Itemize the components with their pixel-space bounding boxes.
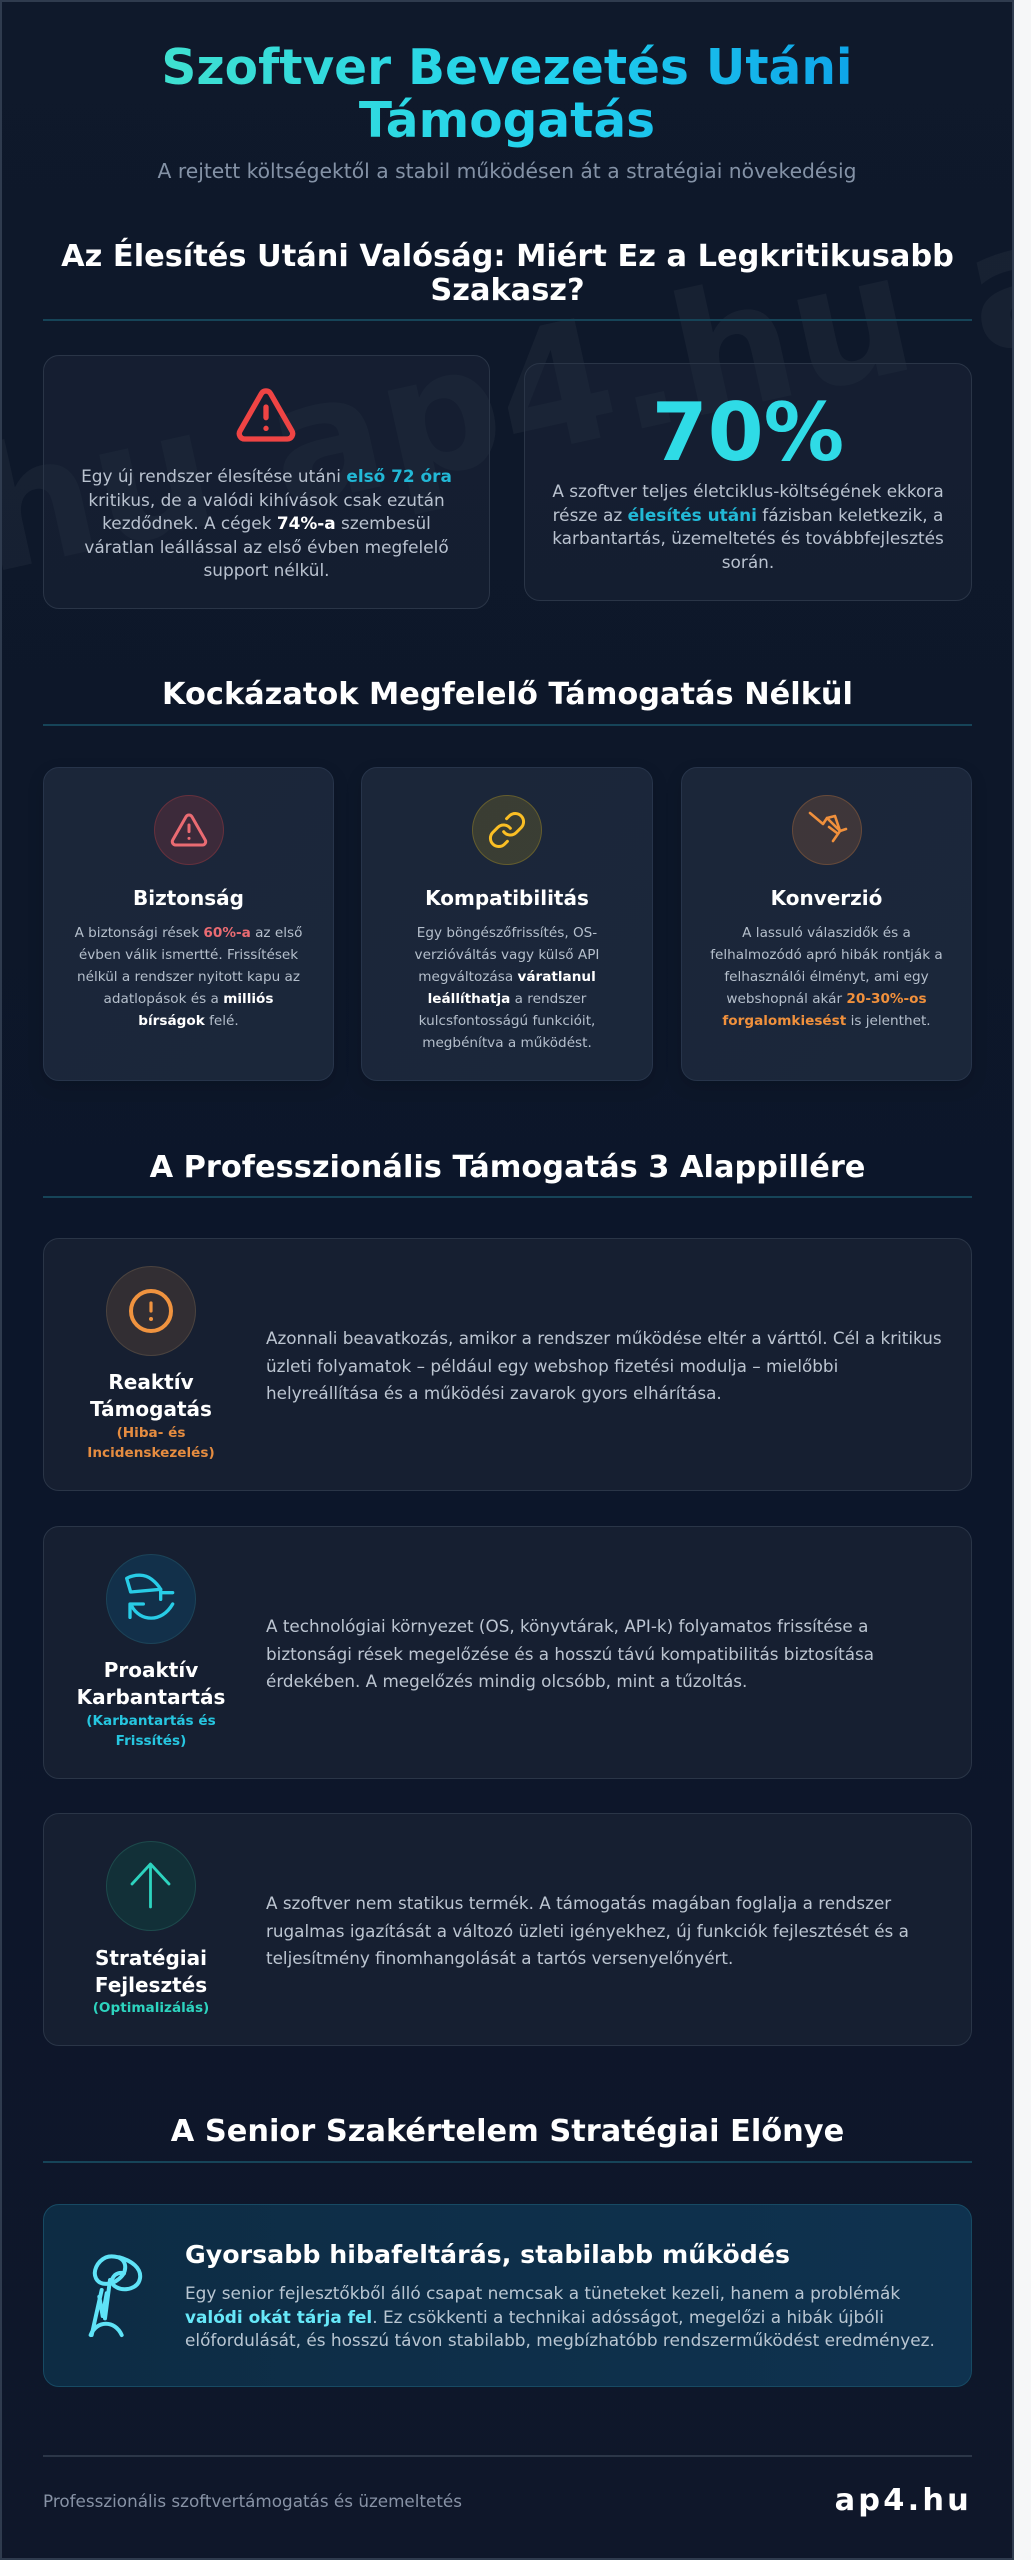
heading: valóság: Szakasz? (430, 272, 585, 308)
text: megváltozása váratlanul (418, 969, 596, 985)
text: verzióváltás vagy külső API (415, 947, 599, 963)
icon glyph: refresh (125, 1574, 174, 1620)
heading: Biztonság (133, 886, 244, 910)
text: senior callout: valódi okát tárja fel. Ez csökkenti a technikai adósságot, megelőzi a hibák újbóli (185, 2307, 884, 2327)
heading: reaktív (90, 1370, 212, 1421)
text: Egy böngészőfrissítés, OS- (417, 925, 597, 941)
icon: warning triangle (236, 388, 296, 442)
text: adatlopások és a milliós (104, 991, 273, 1007)
panel: konverzió (681, 767, 972, 1081)
text: first 72 hours: support nélkül. (203, 560, 330, 580)
heading: stratégiai (95, 1946, 207, 1997)
heading: senior callout: Gyorsabb hibafeltárás, stabilabb működés (185, 2240, 790, 2268)
heading: proaktív: Proaktív (104, 1658, 198, 1682)
heading: alappillérek: A Professzionális Támogatás 3 Alappillére (150, 1150, 865, 1184)
text: stratégiai: A szoftver nem statikus termék. A támogatás magában foglalja a rendszer (266, 1893, 891, 1913)
heading: kockázatok: Kockázatok Megfelelő Támogatás Nélkül (162, 677, 853, 712)
text: senior callout (185, 2283, 935, 2350)
panel: első 72 óra (43, 355, 490, 609)
heading: senior: A Senior Szakértelem Stratégiai Előnye (171, 2114, 844, 2149)
panel: stratégiai (43, 1813, 972, 2046)
text: proaktív: érdekében. A megelőzés mindig olcsóbb, mint a tűzoltás. (266, 1671, 747, 1691)
text: bírságok felé. (138, 1013, 239, 1029)
text: leállíthatja a rendszer (428, 991, 586, 1007)
icon: alert circle (106, 1266, 196, 1356)
text: first 72 hours: kezdődnek. A cégek 74%-a szembesül (102, 513, 431, 533)
text (74, 925, 302, 1029)
text: évben válik ismertté. Frissítések (79, 947, 298, 963)
icon: refresh (106, 1554, 196, 1644)
subheading: reaktív (87, 1425, 215, 1461)
text: first 72 hours: Egy új rendszer élesítése utáni első 72 óra (81, 466, 452, 486)
text: proaktív: biztonsági rések megelőzése és a hosszú távú kompatibilitás biztosítása (266, 1644, 874, 1664)
text: A lassuló válaszidők és a (742, 925, 911, 941)
subheading: reaktív: (Hiba- és (117, 1425, 185, 1441)
subheading: stratégiai: (Optimalizálás) (93, 2000, 209, 2016)
text: megbénítva a működést. (422, 1035, 592, 1051)
icon: security warning (154, 795, 224, 865)
panel: 70% stat (524, 363, 972, 601)
text: first 72 hours: váratlan leállással az első évben megfelelő (84, 537, 449, 557)
title: Támogatás (359, 93, 655, 149)
panel: kompatibilitás (361, 767, 653, 1081)
text: stratégiai (266, 1893, 909, 1968)
subtitle: A rejtett költségektől a stabil működésen át a stratégiai növekedésig (158, 159, 856, 183)
heading: proaktív: Karbantartás (77, 1685, 225, 1709)
text: proaktív: A technológiai környezet (OS, könyvtárak, API-k) folyamatos frissítése a (266, 1616, 868, 1636)
text: lifecycle cost: karbantartás, üzemeltetés és továbbfejlesztés (552, 528, 944, 548)
text: forgalomkiesést is jelenthet. (722, 1013, 931, 1029)
stat: 70%: 70% (652, 385, 844, 479)
text: stratégiai: rugalmas igazítását a változó üzleti igényekhez, új funkciók fejlesztését és a (266, 1921, 909, 1941)
heading: valóság (61, 238, 954, 308)
text: reaktív: üzleti folyamatok – például egy webshop fizetési modulja – mielőbbi (266, 1356, 838, 1376)
footer text: Professzionális szoftvertámogatás és üzemeltetés (43, 2491, 462, 2511)
subheading: proaktív: Frissítés) (116, 1733, 186, 1749)
footer logo: ap4.hu (835, 2483, 972, 2518)
panel: proaktív (43, 1526, 972, 1779)
footer rule (43, 2455, 972, 2457)
heading: proaktív (77, 1658, 225, 1709)
text: first 72 hours (81, 466, 452, 580)
text (710, 925, 943, 1029)
text: A biztonsági rések 60%-a az első (75, 925, 302, 941)
heading: stratégiai: Fejlesztés (95, 1973, 207, 1997)
heading: valóság: Az Élesítés Utáni Valóság: Miért Ez a Legkritikusabb (61, 238, 954, 274)
heading: stratégiai: Stratégiai (95, 1946, 207, 1970)
subheading: proaktív (86, 1713, 216, 1749)
text (415, 925, 599, 1051)
text: stratégiai: teljesítmény finomhangolását a tartós versenyelőnyért. (266, 1948, 733, 1968)
subheading: reaktív: Incidenskezelés) (87, 1445, 215, 1461)
heading: Konverzió (771, 886, 882, 910)
text: reaktív: helyreállítása és a működési zavarok gyors elhárítása. (266, 1383, 722, 1403)
icon: arrow up (106, 1841, 196, 1931)
panel: senior callout (43, 2204, 972, 2387)
heading: reaktív: Támogatás (90, 1397, 212, 1421)
text: lifecycle cost: során. (722, 552, 774, 572)
text: senior callout: Egy senior fejlesztőkből álló csapat nemcsak a tüneteket kezeli, hanem a problémák (185, 2283, 900, 2303)
heading: Kompatibilitás (425, 886, 589, 910)
title: Szoftver Bevezetés Utáni (161, 40, 853, 96)
text: lifecycle cost (552, 481, 944, 572)
text: webshopnál akár 20-30%-os (726, 991, 927, 1007)
text: reaktív: Azonnali beavatkozás, amikor a rendszer működése eltér a várttól. Cél a kritikus (266, 1328, 942, 1348)
panel: reaktív (43, 1238, 972, 1491)
watermark: ap4.hu (249, 214, 930, 547)
text: lifecycle cost: A szoftver teljes életciklus-költségének ekkora (552, 481, 944, 501)
icon: link (472, 795, 542, 865)
text: reaktív (266, 1328, 942, 1403)
text: felhalmozódó apró hibák rontják a (710, 947, 943, 963)
title (161, 40, 853, 149)
text: senior callout: előfordulását, és hosszú távon stabilabb, megbízhatóbb rendszerműködést eredményez. (185, 2330, 935, 2350)
icon: senior (88, 2254, 142, 2338)
text: proaktív (266, 1616, 874, 1691)
panel: biztonság (43, 767, 334, 1081)
icon: conversion drop (792, 795, 862, 865)
text: felhasználói élményt, ami egy (724, 969, 929, 985)
heading: reaktív: Reaktív (108, 1370, 194, 1394)
text: lifecycle cost: része az élesítés utáni fázisban keletkezik, a (553, 505, 943, 525)
watermark (0, 59, 1014, 702)
text: kulcsfontosságú funkcióit, (419, 1013, 595, 1029)
text: first 72 hours: kritikus, de a valódi kihívások csak ezután (88, 490, 445, 510)
text: nélkül a rendszer nyitott kapu az (77, 969, 300, 985)
subheading: proaktív: (Karbantartás és (86, 1713, 216, 1729)
